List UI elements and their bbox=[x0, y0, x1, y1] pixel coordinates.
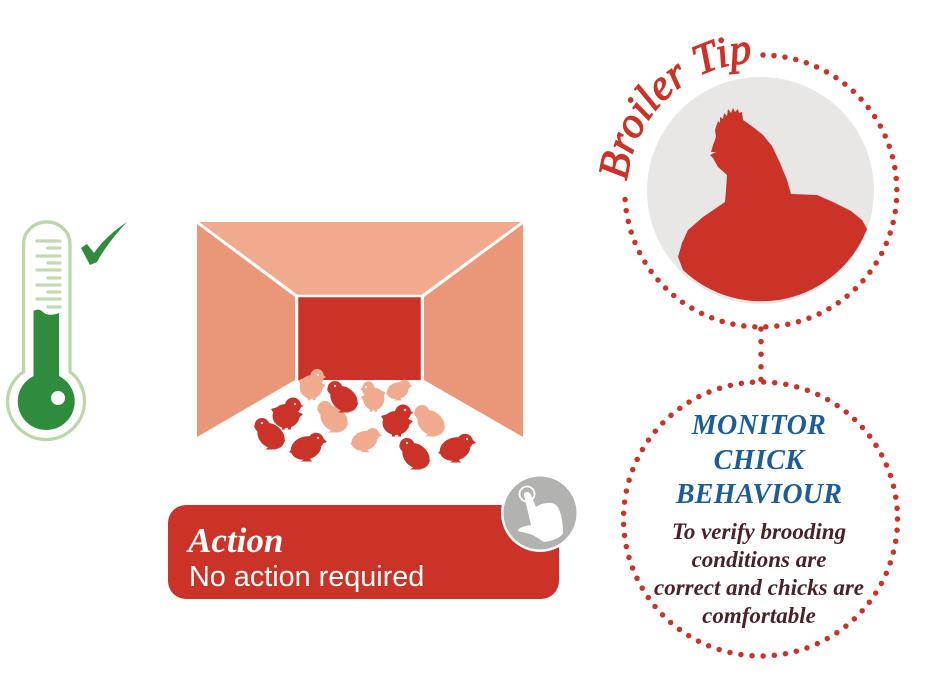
chicks bbox=[252, 369, 476, 474]
monitor description: conditions are bbox=[692, 547, 826, 572]
dotted ring: tip bbox=[625, 55, 897, 327]
action heading: Action bbox=[186, 521, 283, 560]
tip image: hen on grey circle bbox=[647, 77, 874, 304]
thermometer bbox=[8, 222, 84, 440]
monitor description bbox=[654, 519, 864, 628]
title: Broiler Tip: Broiler Tip bbox=[598, 37, 750, 182]
monitor description: correct and chicks are bbox=[654, 575, 864, 600]
monitor description: comfortable bbox=[702, 603, 816, 628]
dotted ring: monitor bbox=[624, 382, 898, 656]
icon: check mark bbox=[81, 222, 127, 265]
connector dots bbox=[758, 329, 764, 381]
monitor heading: MONITOR bbox=[691, 410, 826, 441]
monitor heading: CHICK bbox=[714, 445, 806, 476]
monitor heading: BEHAVIOUR bbox=[675, 479, 842, 510]
action box bbox=[168, 505, 559, 599]
monitor description: To verify brooding bbox=[672, 519, 846, 544]
room illustration bbox=[197, 222, 523, 437]
monitor heading bbox=[675, 410, 842, 510]
action description: No action required bbox=[189, 561, 424, 593]
icon: pointing hand bbox=[501, 474, 579, 552]
